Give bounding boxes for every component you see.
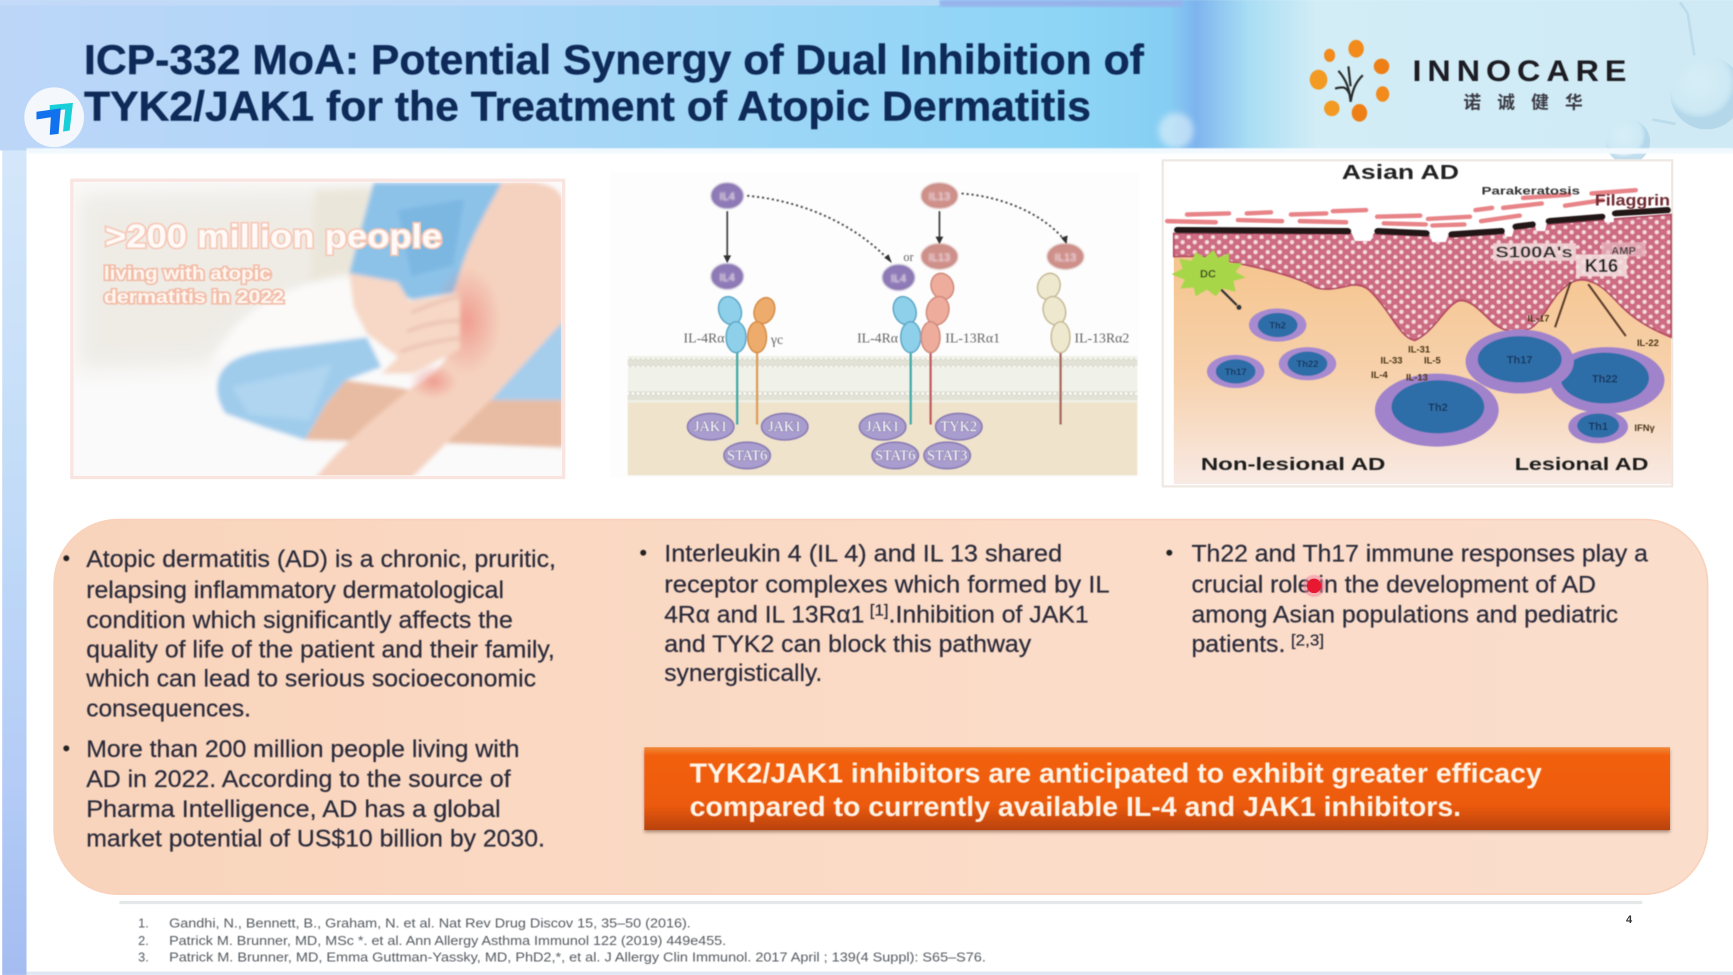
cytokines: IL13	[929, 191, 950, 203]
JAK and STAT kinases: STAT6	[727, 448, 767, 464]
pajama shirt	[349, 182, 504, 300]
text block: atopic dermatitis overview: Atopic dermatitis (AD) is a chronic, pruritic,	[86, 546, 556, 573]
lesion state labels: Lesional AD	[1515, 454, 1649, 474]
receptor domains	[715, 270, 1070, 353]
cytokine labels: IL-13	[1406, 371, 1428, 382]
photo caption: >200 million people	[105, 219, 442, 256]
cytokine labels: IL-33	[1381, 355, 1402, 366]
decorative molecule bubbles	[1158, 2, 1733, 164]
text block: atopic dermatitis overview: More than 200 million people living with	[86, 736, 519, 763]
text block: atopic dermatitis overview: relapsing inflammatory dermatological	[86, 577, 504, 604]
T helper cells: lesional	[1375, 329, 1664, 447]
cytokines: IL13	[1055, 252, 1076, 264]
lesion state labels: Non-lesional AD	[1201, 454, 1386, 474]
text block: IL-4 and IL-13 receptor mechanism: 4Rα and IL 13Rα1	[664, 601, 864, 628]
text block: Th22 and Th17 responses: among Asian populations and pediatric	[1191, 601, 1618, 628]
text block: atopic dermatitis overview	[63, 546, 556, 853]
stratum corneum	[1167, 190, 1668, 242]
callout banner	[644, 747, 1670, 830]
photo caption: dermatitis in 2022	[104, 286, 284, 307]
title: ICP-332 MoA: Potential Synergy of Dual Inhibition of	[84, 36, 1144, 83]
cytokine labels: IL-5	[1424, 355, 1441, 366]
callout text	[690, 758, 1542, 822]
references	[138, 915, 986, 965]
text block: atopic dermatitis overview: consequences.	[86, 695, 251, 722]
lesion state labels	[1201, 454, 1649, 474]
page number: 4	[1626, 914, 1633, 926]
text block: IL-4 and IL-13 receptor mechanism: and TYK2 can block this pathway	[664, 631, 1032, 658]
cytokines: IL4	[720, 272, 735, 284]
T helper cells: non-lesional: Th17	[1225, 366, 1247, 377]
text block: Th22 and Th17 responses: Th22 and Th17 immune responses play a	[1191, 541, 1648, 568]
photo scene	[66, 177, 569, 481]
T helper cells: lesional: Th2	[1428, 402, 1448, 414]
text block: Th22 and Th17 responses: [2,3]	[1291, 633, 1324, 650]
text block: Th22 and Th17 responses: crucial role in the development of AD	[1191, 571, 1596, 598]
arm and hand	[349, 273, 460, 374]
title: TYK2/JAK1 for the Treatment of Atopic Dermatitis	[84, 83, 1091, 130]
JAK and STAT kinases: JAK1	[768, 419, 801, 435]
thigh	[305, 380, 564, 448]
receptor labels: IL-13Rα2	[1075, 331, 1129, 346]
cytokine labels: IL-31	[1408, 344, 1430, 355]
epidermal labels	[1482, 186, 1670, 276]
epidermal labels: K16	[1585, 255, 1618, 276]
pajama shorts right	[491, 321, 564, 400]
logo Chinese name: 诺诚健华	[1463, 91, 1583, 112]
photo caption	[104, 219, 442, 307]
pajama leg	[217, 337, 381, 440]
cytokine labels: IL-4	[1371, 369, 1388, 380]
receptor labels	[684, 250, 1129, 347]
title	[84, 36, 1144, 130]
callout text: TYK2/JAK1 inhibitors are anticipated to exhibit greater efficacy	[690, 758, 1542, 789]
JAK and STAT kinases: STAT3	[927, 448, 967, 464]
receptor stalks	[737, 350, 1061, 425]
T helper cells: lesional: Th1	[1588, 421, 1608, 433]
JAK and STAT kinases: TYK2	[940, 419, 977, 435]
epidermal labels: AMP	[1611, 245, 1636, 257]
panel: key points box	[54, 520, 1708, 894]
text block: atopic dermatitis overview: condition which significantly affects the	[86, 607, 513, 634]
text block: atopic dermatitis overview: quality of life of the patient and their family,	[86, 637, 555, 664]
T helper cells: non-lesional: Th22	[1297, 358, 1318, 369]
receptor labels: or	[903, 250, 914, 264]
callout text: compared to currently available IL-4 and JAK1 inhibitors.	[690, 791, 1461, 822]
text block: IL-4 and IL-13 receptor mechanism: synergistically.	[664, 660, 822, 687]
receptor labels: IL-4Rα	[857, 331, 898, 346]
T helper cells: non-lesional	[1207, 308, 1336, 388]
receptor labels: IL-4Rα	[684, 331, 725, 346]
cell interior and membrane	[628, 356, 1137, 475]
panel: Asian AD immune diagram	[1163, 160, 1672, 486]
JAK and STAT kinases: JAK1	[694, 419, 727, 435]
header band	[0, 0, 1733, 164]
epidermal labels: S100A's	[1495, 245, 1573, 262]
JAK and STAT kinases	[687, 413, 982, 469]
arrows	[723, 194, 1068, 263]
cytokine labels: IL-17	[1528, 313, 1549, 324]
JAK and STAT kinases: STAT6	[875, 448, 915, 464]
cytokines: IL13	[929, 252, 950, 264]
panel: IL-4 / IL-13 receptor signalling pathway	[610, 173, 1138, 478]
rash	[440, 274, 496, 366]
header bottom edge	[27, 148, 1733, 154]
photo caption: living with atopic	[104, 263, 271, 284]
references: 2.	[138, 933, 149, 948]
epidermal labels: Filaggrin	[1595, 193, 1670, 210]
panel: photo of child with atopic dermatitis	[66, 177, 569, 481]
text block: IL-4 and IL-13 receptor mechanism: Interleukin 4 (IL 4) and IL 13 shared	[664, 541, 1062, 568]
bottom edge	[27, 972, 1733, 975]
epidermal labels: Parakeratosis	[1482, 186, 1580, 198]
T helper cells: non-lesional: Th2	[1269, 319, 1286, 330]
receptor labels: γc	[770, 332, 783, 347]
footer rule	[119, 901, 1642, 904]
cytokines	[712, 184, 1083, 290]
text block: atopic dermatitis overview: market potential of US$10 billion by 2030.	[86, 826, 545, 853]
cytokine labels: IFNγ	[1634, 422, 1656, 433]
cytokine arrows	[1555, 282, 1626, 336]
epidermis	[1174, 215, 1671, 341]
cytokine labels: IL-22	[1637, 337, 1659, 348]
cytokines: IL4	[720, 191, 735, 203]
text block: atopic dermatitis overview: Pharma Intelligence, AD has a global	[86, 796, 501, 823]
references: Gandhi, N., Bennett, B., Graham, N. et al. Nat Rev Drug Discov 15, 35–50 (2016).	[169, 915, 691, 930]
laser pointer dot	[1303, 575, 1325, 597]
text block: IL-4 and IL-13 receptor mechanism	[640, 541, 1110, 687]
references: 3.	[138, 950, 149, 965]
receptor labels: IL-13Rα1	[945, 331, 1000, 346]
T helper cells: lesional: Th17	[1507, 355, 1533, 367]
cytokine labels	[1371, 313, 1659, 433]
references: Patrick M. Brunner, MD, Emma Guttman-Yassky, MD, PhD2,*, et al. J Allergy Clin Immunol. 2017 April ; 139(4 Suppl): S65–S76.	[169, 950, 986, 965]
T helper cells: lesional: Th22	[1592, 374, 1618, 386]
DC arrow	[1221, 290, 1241, 310]
JAK and STAT kinases: JAK1	[866, 419, 899, 435]
logo mark	[1310, 40, 1389, 122]
cytokines: IL4	[891, 273, 906, 285]
text block: Th22 and Th17 responses	[1166, 541, 1648, 658]
dendritic cell: DC	[1200, 269, 1216, 281]
text block: IL-4 and IL-13 receptor mechanism: [1]	[870, 603, 889, 620]
dendritic cell	[1172, 250, 1246, 296]
text block: atopic dermatitis overview: which can lead to serious socioeconomic	[85, 665, 536, 692]
text block: IL-4 and IL-13 receptor mechanism: receptor complexes which formed by IL	[664, 571, 1110, 598]
references: 1.	[138, 915, 149, 930]
text block: IL-4 and IL-13 receptor mechanism: .Inhibition of JAK1	[889, 601, 1089, 628]
left side strip	[2, 0, 27, 975]
watermark icon	[24, 87, 84, 147]
logo wordmark: INNOCARE	[1412, 55, 1632, 88]
references: Patrick M. Brunner, MD, MSc *. et al. Ann Allergy Asthma Immunol 122 (2019) 449e455.	[169, 933, 726, 948]
logo: InnoCare	[1310, 40, 1632, 122]
text block: atopic dermatitis overview: AD in 2022. According to the source of	[86, 766, 511, 793]
text block: Th22 and Th17 responses: patients.	[1191, 631, 1285, 658]
Asian AD heading: Asian AD	[1342, 161, 1459, 184]
raised leg	[313, 181, 564, 481]
dermis	[1174, 252, 1671, 484]
